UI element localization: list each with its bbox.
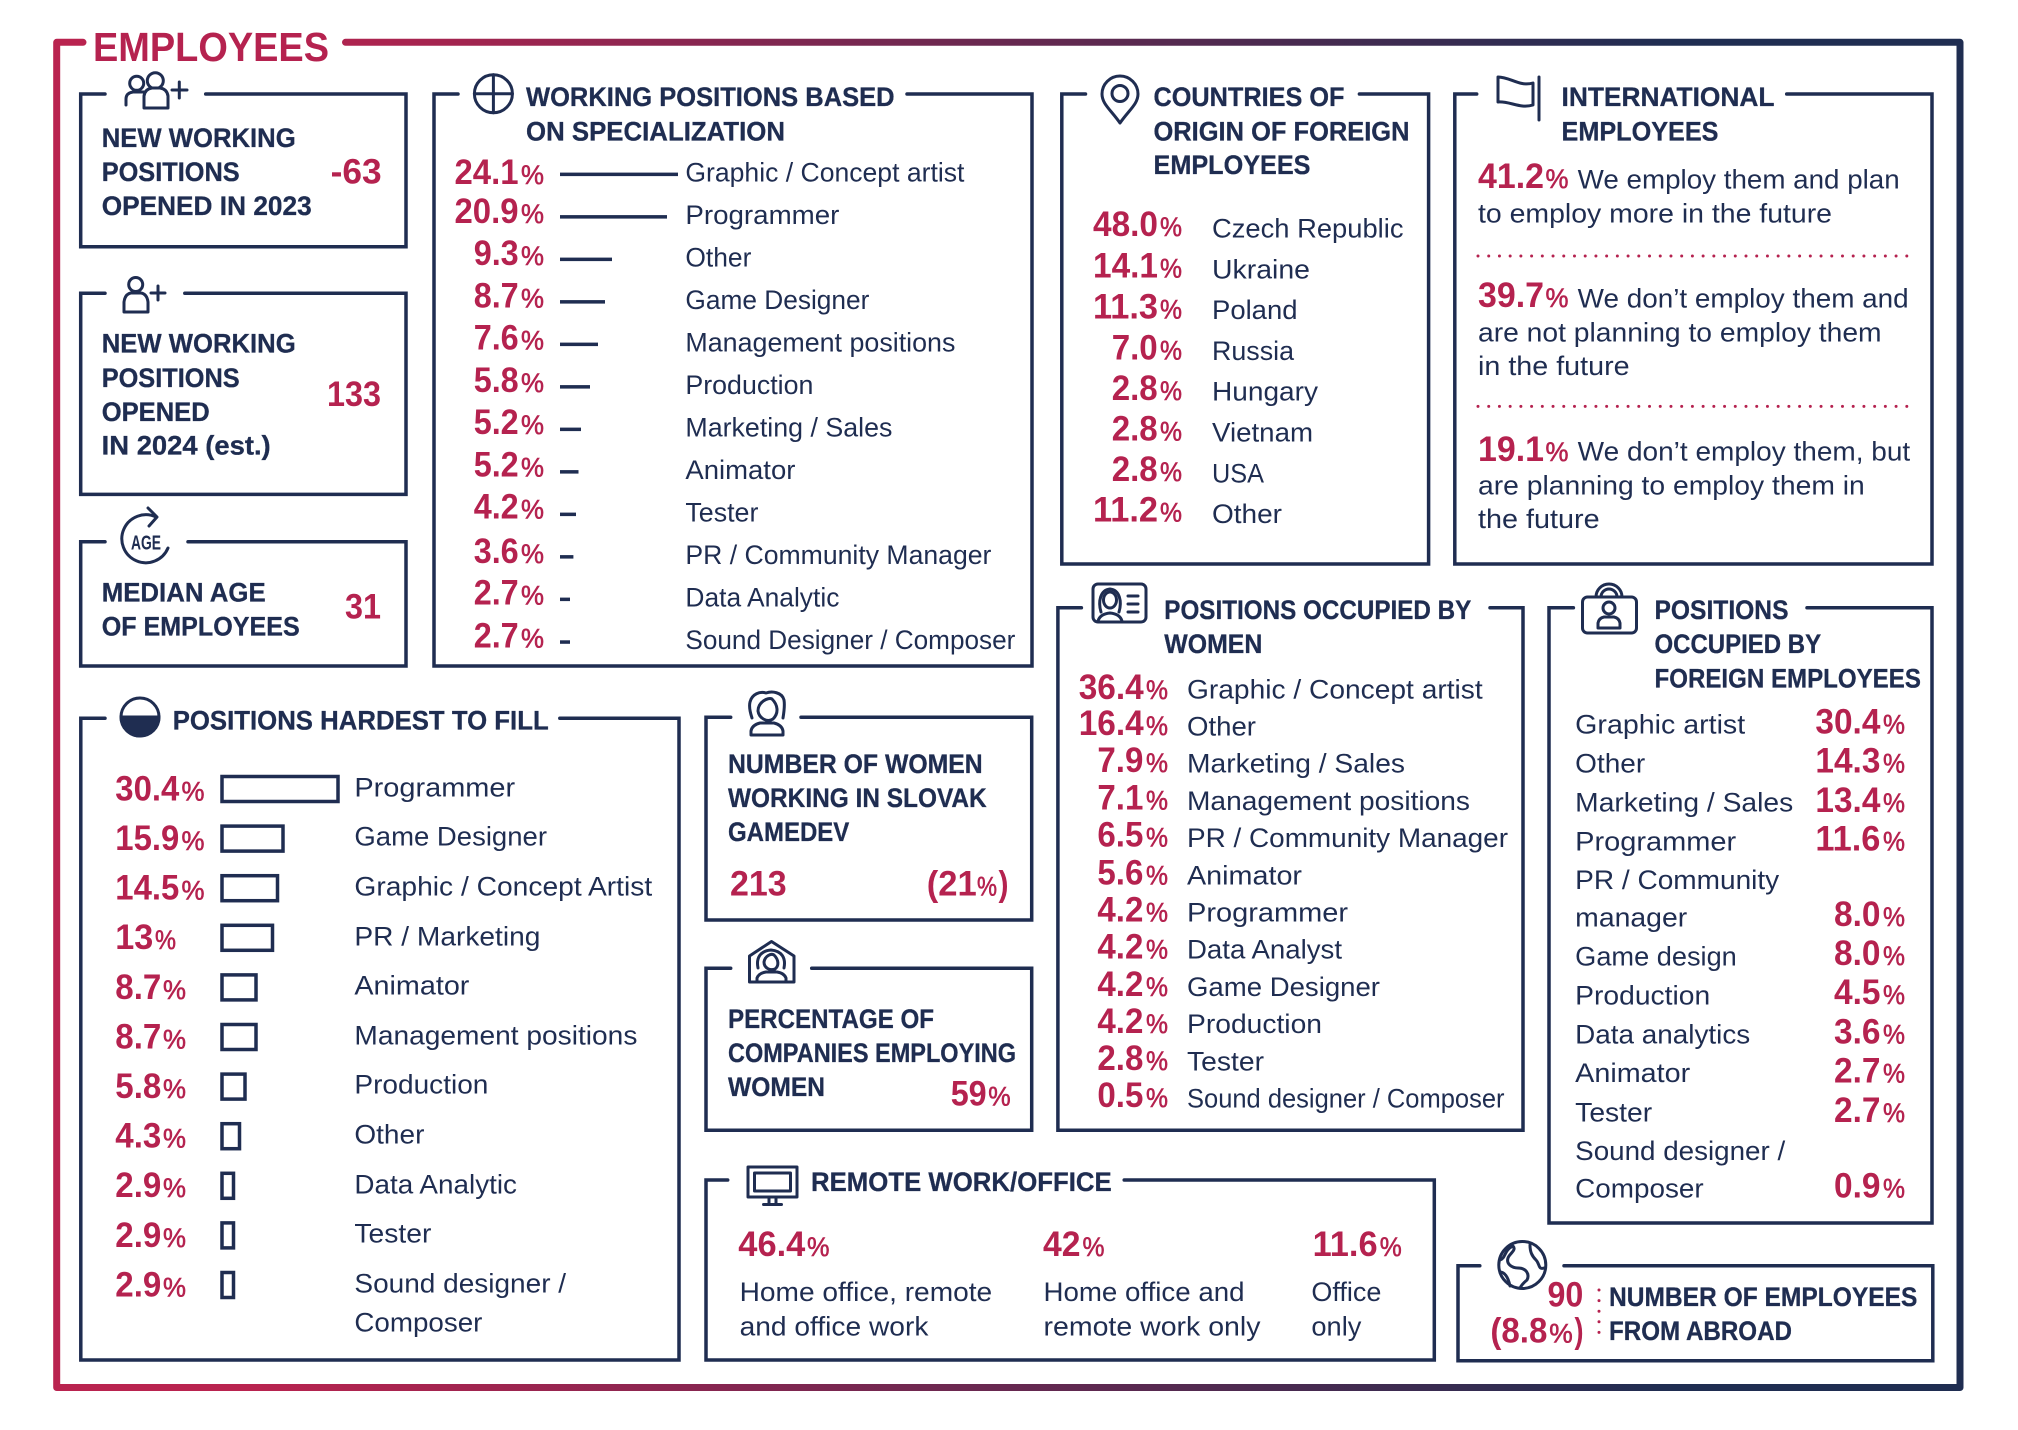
numbers column (1815, 702, 1905, 1205)
heading: positions hardest to fill: POSITIONS HARDEST TO FILL (173, 706, 549, 736)
value: 90 and 8.8% (1490, 1276, 1584, 1350)
column: home office and remote work only: remote work only (1044, 1312, 1261, 1342)
numbers column: % (1160, 335, 1182, 365)
numbers column: 3.6 (474, 532, 519, 571)
heading: countries of origin (1154, 82, 1410, 180)
labels column: Programmer (685, 200, 839, 230)
labels column: Management positions (1187, 786, 1470, 816)
value: 59%: 59 (951, 1074, 987, 1113)
labels column: Production (685, 370, 813, 400)
heading: new working positions opened in 2024: OPENED (102, 397, 210, 427)
labels column: Animator (354, 970, 469, 1000)
heading: new working positions opened in 2023: NEW WORKING (102, 123, 296, 153)
labels column: Graphic / Concept artist (1187, 674, 1483, 704)
numbers column: 4.2 (1097, 965, 1143, 1004)
numbers column: % (521, 581, 544, 611)
numbers column: % (521, 326, 544, 356)
icon: age: AGE (131, 532, 161, 554)
text block: 39.7%: We don’t employ them and (1578, 284, 1909, 314)
panel: working positions based on specialization (434, 75, 1032, 666)
numbers column: % (521, 495, 544, 525)
column: office only: 11.6 (1313, 1225, 1378, 1264)
heading: international employees (1562, 82, 1774, 146)
numbers column: 13.4 (1815, 781, 1881, 820)
labels column (685, 157, 1015, 655)
numbers column: 8.0 (1834, 934, 1880, 973)
numbers column: % (1146, 1083, 1168, 1113)
icon: crosshair circle (474, 75, 512, 113)
value: 31: 31 (345, 587, 381, 626)
heading: positions occupied by women (1164, 595, 1471, 659)
numbers column: % (1883, 749, 1905, 779)
numbers column: % (1883, 902, 1905, 932)
labels column: Animator (685, 455, 795, 485)
numbers column: % (163, 1024, 186, 1054)
labels column: Marketing / Sales (685, 412, 892, 442)
labels column: Sound Designer / Composer (685, 625, 1015, 655)
labels column: Other (1187, 712, 1256, 742)
labels column: Game Designer (685, 285, 869, 315)
numbers column: 2.9 (115, 1216, 161, 1255)
numbers column: 0.9 (1834, 1166, 1880, 1205)
labels column: Game Designer (354, 822, 547, 852)
labels column: Other (1212, 499, 1282, 529)
heading: international employees: EMPLOYEES (1562, 116, 1718, 146)
numbers column: % (521, 453, 544, 483)
panel: number of women (706, 692, 1032, 920)
labels column: Other (1575, 748, 1645, 778)
numbers column: % (521, 368, 544, 398)
numbers column: 5.2 (474, 446, 519, 485)
numbers column: % (1146, 748, 1168, 778)
labels column: Marketing / Sales (1575, 787, 1793, 817)
value: 90 and 8.8%: ) (1574, 1311, 1584, 1350)
panel: positions occupied by foreign employees (1549, 584, 1932, 1223)
numbers column: 5.8 (115, 1067, 161, 1106)
numbers column: 8.7 (115, 968, 161, 1007)
numbers column: 5.8 (474, 361, 519, 400)
labels column: Programmer (1575, 826, 1736, 856)
column: home office, remote and office work: % (807, 1232, 830, 1262)
heading: median age of employees (102, 578, 300, 641)
labels column: PR / Marketing (354, 921, 540, 951)
numbers column: 4.5 (1834, 973, 1880, 1012)
labels column: Czech Republic (1212, 214, 1404, 244)
labels column: Graphic / Concept Artist (354, 871, 653, 901)
value: 90 and 8.8%: (8.8 (1490, 1311, 1547, 1350)
icon: globe (1499, 1242, 1546, 1288)
panel: international employees (1455, 77, 1932, 564)
text block: 39.7%: % (1546, 283, 1568, 313)
panel: countries of origin (1062, 76, 1429, 564)
numbers column: % (1883, 788, 1905, 818)
labels column: Graphic / Concept artist (685, 157, 965, 187)
text block: 19.1%: 19.1 (1478, 430, 1544, 469)
icon: id card with woman (1093, 584, 1146, 622)
numbers column: 2.8 (1097, 1039, 1143, 1078)
column: home office, remote and office work: and office work (740, 1312, 929, 1342)
numbers column: 2.9 (115, 1265, 161, 1304)
labels column: Graphic artist (1575, 709, 1746, 739)
heading: positions occupied by women: POSITIONS OCCUPIED BY (1164, 595, 1471, 625)
value: 213: 213 (730, 865, 787, 904)
value: 59%: % (988, 1081, 1011, 1111)
title: EMPLOYEES (93, 24, 329, 70)
text block: 41.2%: to employ more in the future (1478, 198, 1832, 228)
heading: working positions: ON SPECIALIZATION (526, 116, 785, 146)
icon: age (122, 508, 168, 563)
column: home office, remote and office work (738, 1225, 992, 1342)
numbers column: 8.7 (115, 1017, 161, 1056)
column: home office and remote work only: 42 (1043, 1225, 1080, 1264)
heading: countries of origin: COUNTRIES OF (1154, 82, 1344, 112)
heading: number of women (728, 749, 987, 847)
numbers column: 11.3 (1093, 288, 1158, 326)
text block: 39.7%: in the future (1478, 351, 1630, 381)
icon: woman (750, 692, 784, 735)
panel: positions hardest to fill (81, 698, 679, 1360)
numbers column: 8.7 (474, 276, 519, 316)
text block: 19.1%: are planning to employ them in (1478, 470, 1865, 500)
numbers column: % (521, 199, 544, 229)
numbers column: % (182, 776, 204, 806)
numbers column: % (1883, 1173, 1905, 1203)
heading: positions occupied by foreign employees (1654, 595, 1921, 693)
heading: working positions (526, 82, 895, 146)
panel: employees from abroad (1458, 1242, 1933, 1361)
heading: working positions: WORKING POSITIONS BASED (526, 82, 895, 112)
numbers column: % (1883, 1020, 1905, 1050)
labels column: Sound designer / (354, 1268, 567, 1298)
heading: positions occupied by foreign employees: OCCUPIED BY (1654, 629, 1821, 659)
labels column: Hungary (1212, 377, 1319, 407)
text block: 41.2%: We employ them and plan (1578, 164, 1900, 194)
labels column: Data analytics (1575, 1020, 1750, 1050)
numbers column: % (1146, 1009, 1168, 1039)
heading: new working positions opened in 2024: POSITIONS (102, 363, 240, 393)
numbers column: % (1160, 498, 1182, 528)
numbers column: 13 (115, 918, 153, 957)
text block: 19.1%: We don’t employ them, but (1578, 436, 1911, 466)
panel: new working positions 2023 (81, 73, 406, 247)
numbers column: 2.7 (474, 574, 519, 613)
numbers column: % (1146, 898, 1168, 928)
column: home office, remote and office work: Home office, remote (740, 1277, 992, 1307)
text block: 39.7%: 39.7 (1478, 276, 1544, 315)
heading: number of employees from abroad: NUMBER OF EMPLOYEES (1609, 1282, 1917, 1312)
numbers column: % (163, 1124, 186, 1154)
labels column: Production (1575, 980, 1710, 1010)
text block: 19.1%: the future (1478, 504, 1600, 534)
labels column: Tester (685, 497, 758, 527)
labels column: Tester (1575, 1097, 1652, 1127)
labels column: Sound designer / (1575, 1136, 1786, 1166)
labels column: Russia (1212, 336, 1295, 366)
heading: countries of origin: EMPLOYEES (1154, 150, 1310, 180)
icon: half-filled circle (121, 698, 159, 736)
numbers column: 3.6 (1834, 1012, 1880, 1052)
numbers column: % (1146, 934, 1168, 964)
numbers column: 4.2 (1097, 928, 1143, 966)
numbers column: 9.3 (474, 234, 519, 273)
numbers column: % (1146, 675, 1168, 705)
numbers column: % (1160, 254, 1182, 284)
bar chart: outlined bars (222, 776, 338, 1298)
panel: percentage of companies employing women (706, 942, 1032, 1130)
heading: percentage of companies: PERCENTAGE OF (728, 1004, 934, 1034)
numbers column: 14.3 (1815, 742, 1880, 781)
numbers column: % (182, 876, 204, 906)
numbers column: % (1883, 1059, 1905, 1089)
numbers column: 30.4 (1815, 702, 1881, 741)
numbers column: 2.8 (1112, 410, 1158, 449)
numbers column: % (163, 1272, 186, 1302)
labels column: Game Designer (1187, 972, 1380, 1002)
numbers column (1079, 668, 1168, 1115)
labels column (354, 772, 653, 1337)
labels column: Vietnam (1212, 418, 1313, 448)
numbers column: 6.5 (1097, 816, 1143, 855)
panel: positions occupied by women (1058, 584, 1523, 1130)
column: office only: only (1311, 1312, 1362, 1342)
bar chart: line bars (560, 173, 678, 644)
numbers column: % (1146, 1046, 1168, 1076)
numbers column: % (1160, 294, 1182, 324)
numbers column: 16.4 (1079, 704, 1144, 743)
column: home office and remote work only: % (1082, 1232, 1104, 1262)
numbers column: 48.0 (1093, 205, 1158, 244)
numbers column: 20.9 (454, 192, 518, 231)
numbers column: % (1883, 941, 1905, 971)
value: 21%: (21 (927, 865, 977, 904)
labels column: Production (1187, 1009, 1322, 1039)
icon: flag (1498, 77, 1539, 120)
numbers column: % (155, 925, 176, 955)
numbers column: % (1160, 457, 1182, 487)
labels column: Tester (1187, 1046, 1264, 1076)
heading: international employees: INTERNATIONAL (1562, 82, 1774, 112)
heading: positions occupied by foreign employees: POSITIONS (1654, 595, 1788, 625)
numbers column: % (1160, 417, 1182, 447)
column: home office, remote and office work: 46.4 (738, 1225, 806, 1264)
numbers column: 11.2 (1093, 491, 1158, 530)
heading: median age of employees: OF EMPLOYEES (102, 611, 300, 641)
panel: remote work / office (706, 1167, 1434, 1360)
icon: person plus (124, 278, 165, 312)
heading: median age of employees: MEDIAN AGE (102, 578, 266, 608)
numbers column: % (1883, 826, 1905, 856)
labels column: Tester (354, 1218, 431, 1248)
heading: remote work/office: REMOTE WORK/OFFICE (811, 1167, 1112, 1197)
value: 90 and 8.8%: 90 (1548, 1276, 1583, 1315)
numbers column: 7.6 (474, 319, 519, 358)
labels column: Poland (1212, 295, 1298, 325)
labels column: Animator (1575, 1058, 1690, 1088)
column: home office and remote work only: Home office and (1044, 1277, 1244, 1307)
labels column: Composer (1575, 1173, 1704, 1203)
numbers column: % (1160, 376, 1182, 406)
numbers column: % (1883, 1098, 1905, 1128)
numbers column: % (1146, 860, 1168, 890)
numbers column: % (182, 826, 204, 856)
column: office only (1311, 1225, 1402, 1342)
labels column: Management positions (685, 327, 955, 357)
numbers column: 5.6 (1097, 853, 1143, 892)
heading: positions occupied by women: WOMEN (1164, 629, 1262, 659)
text block: 39.7%: are not planning to employ them (1478, 317, 1882, 347)
column: office only: % (1380, 1232, 1402, 1262)
numbers column: % (521, 624, 544, 654)
heading: new working positions opened in 2023: POSITIONS (102, 157, 240, 187)
labels column: Other (354, 1120, 424, 1150)
heading: new working positions opened in 2024: IN 2024 (est.) (102, 430, 271, 460)
labels column: PR / Community (1575, 865, 1780, 895)
value: 21%: ) (998, 865, 1008, 904)
heading: number of employees from abroad: FROM ABROAD (1609, 1316, 1792, 1346)
labels column: Game design (1575, 942, 1737, 972)
column: home office and remote work only (1043, 1225, 1261, 1342)
numbers column: 8.0 (1834, 895, 1880, 934)
labels column: manager (1575, 902, 1687, 932)
numbers column: 2.9 (115, 1166, 161, 1205)
numbers column: 2.7 (1834, 1052, 1880, 1091)
labels column: Sound designer / Composer (1187, 1084, 1505, 1114)
labels column: Data Analytic (685, 582, 839, 612)
numbers column: % (521, 160, 544, 190)
value: 21%: % (977, 872, 997, 902)
labels column: Other (685, 242, 751, 272)
numbers column: 4.2 (1097, 891, 1143, 930)
numbers column: % (1146, 711, 1168, 741)
value: -63: -63 (331, 152, 382, 191)
labels column: Data Analyst (1187, 935, 1343, 965)
labels column: USA (1212, 458, 1264, 488)
numbers column: % (163, 975, 186, 1005)
numbers column: 2.7 (1834, 1091, 1880, 1130)
value: 21% (927, 865, 1008, 904)
icon: location pin (1102, 76, 1138, 123)
numbers column: % (521, 241, 544, 271)
numbers column: % (521, 539, 544, 569)
heading: new working positions opened in 2024 (102, 328, 296, 460)
labels column: Management positions (354, 1020, 637, 1050)
text block: 19.1%: % (1546, 437, 1568, 467)
numbers column: % (163, 1223, 186, 1253)
value: 133: 133 (327, 375, 381, 414)
numbers column: 5.2 (474, 403, 519, 442)
numbers column: 2.8 (1112, 450, 1158, 489)
text block: 41.2%: 41.2 (1478, 157, 1544, 196)
heading: new working positions opened in 2023 (102, 123, 312, 221)
text block: 39.7% (1478, 276, 1909, 381)
numbers column: 36.4 (1079, 668, 1144, 707)
numbers column (1093, 205, 1182, 530)
heading: number of women: NUMBER OF WOMEN (728, 749, 983, 779)
heading: positions occupied by foreign employees: FOREIGN EMPLOYEES (1654, 663, 1921, 693)
labels column: Composer (354, 1307, 482, 1337)
labels column: Production (354, 1070, 488, 1100)
numbers column: 7.1 (1097, 778, 1143, 817)
numbers column: 4.2 (1097, 1002, 1143, 1041)
labels column: Animator (1187, 860, 1302, 890)
labels column (1212, 214, 1404, 529)
numbers column: 7.0 (1112, 328, 1158, 367)
labels column: PR / Community Manager (1187, 823, 1508, 853)
panel: median age (81, 508, 406, 666)
numbers column: % (1146, 823, 1168, 853)
heading: number of employees from abroad (1609, 1282, 1917, 1346)
text block: 19.1% (1478, 430, 1911, 534)
numbers column: % (1883, 709, 1905, 739)
numbers column: 0.5 (1097, 1076, 1143, 1115)
labels column: Ukraine (1212, 254, 1310, 284)
numbers column: % (1146, 972, 1168, 1002)
column: office only: Office (1311, 1277, 1381, 1307)
numbers column: 4.3 (115, 1117, 161, 1156)
numbers column: 24.1 (454, 153, 518, 192)
numbers column: 14.1 (1093, 246, 1158, 286)
numbers column: % (163, 1173, 186, 1203)
labels column (1575, 709, 1793, 1203)
text block: 41.2%: % (1546, 164, 1568, 194)
heading: percentage of companies (728, 1004, 1016, 1102)
numbers column: 15.9 (115, 819, 179, 858)
numbers column: 2.8 (1112, 369, 1158, 408)
panel: new working positions 2024 (81, 278, 406, 494)
labels column: Marketing / Sales (1187, 749, 1405, 779)
heading: number of women: WORKING IN SLOVAK (728, 783, 987, 813)
numbers column (115, 770, 204, 1304)
value: 90 and 8.8%: % (1549, 1318, 1573, 1348)
numbers column: % (521, 284, 544, 314)
numbers column (454, 153, 544, 656)
text block: 41.2% (1478, 157, 1900, 228)
numbers column: 11.6 (1815, 820, 1880, 858)
numbers column: 2.7 (474, 616, 519, 656)
numbers column: % (163, 1074, 186, 1104)
labels column: Data Analytic (354, 1170, 517, 1200)
icon: house with woman (750, 942, 794, 982)
icon: monitor (748, 1167, 797, 1204)
labels column: Programmer (1187, 898, 1348, 928)
numbers column: % (1146, 785, 1168, 815)
labels column: Programmer (354, 772, 515, 802)
numbers column: 7.9 (1097, 741, 1143, 780)
icon: id badge (1582, 584, 1636, 633)
labels column: PR / Community Manager (685, 540, 991, 570)
numbers column: % (1883, 980, 1905, 1010)
icon: two people plus (126, 73, 187, 108)
labels column (1187, 674, 1508, 1114)
heading: new working positions opened in 2023: OPENED IN 2023 (102, 191, 312, 221)
heading: countries of origin: ORIGIN OF FOREIGN (1154, 116, 1410, 146)
numbers column: 14.5 (115, 869, 179, 908)
numbers column: % (1160, 212, 1182, 242)
heading: percentage of companies: COMPANIES EMPLOYING (728, 1038, 1016, 1068)
numbers column: % (521, 410, 544, 440)
value: 59% (951, 1074, 1011, 1113)
numbers column: 4.2 (474, 488, 519, 527)
numbers column: 30.4 (115, 770, 180, 808)
heading: new working positions opened in 2024: NEW WORKING (102, 328, 296, 358)
heading: number of women: GAMEDEV (728, 817, 849, 847)
heading: percentage of companies: WOMEN (728, 1072, 825, 1102)
